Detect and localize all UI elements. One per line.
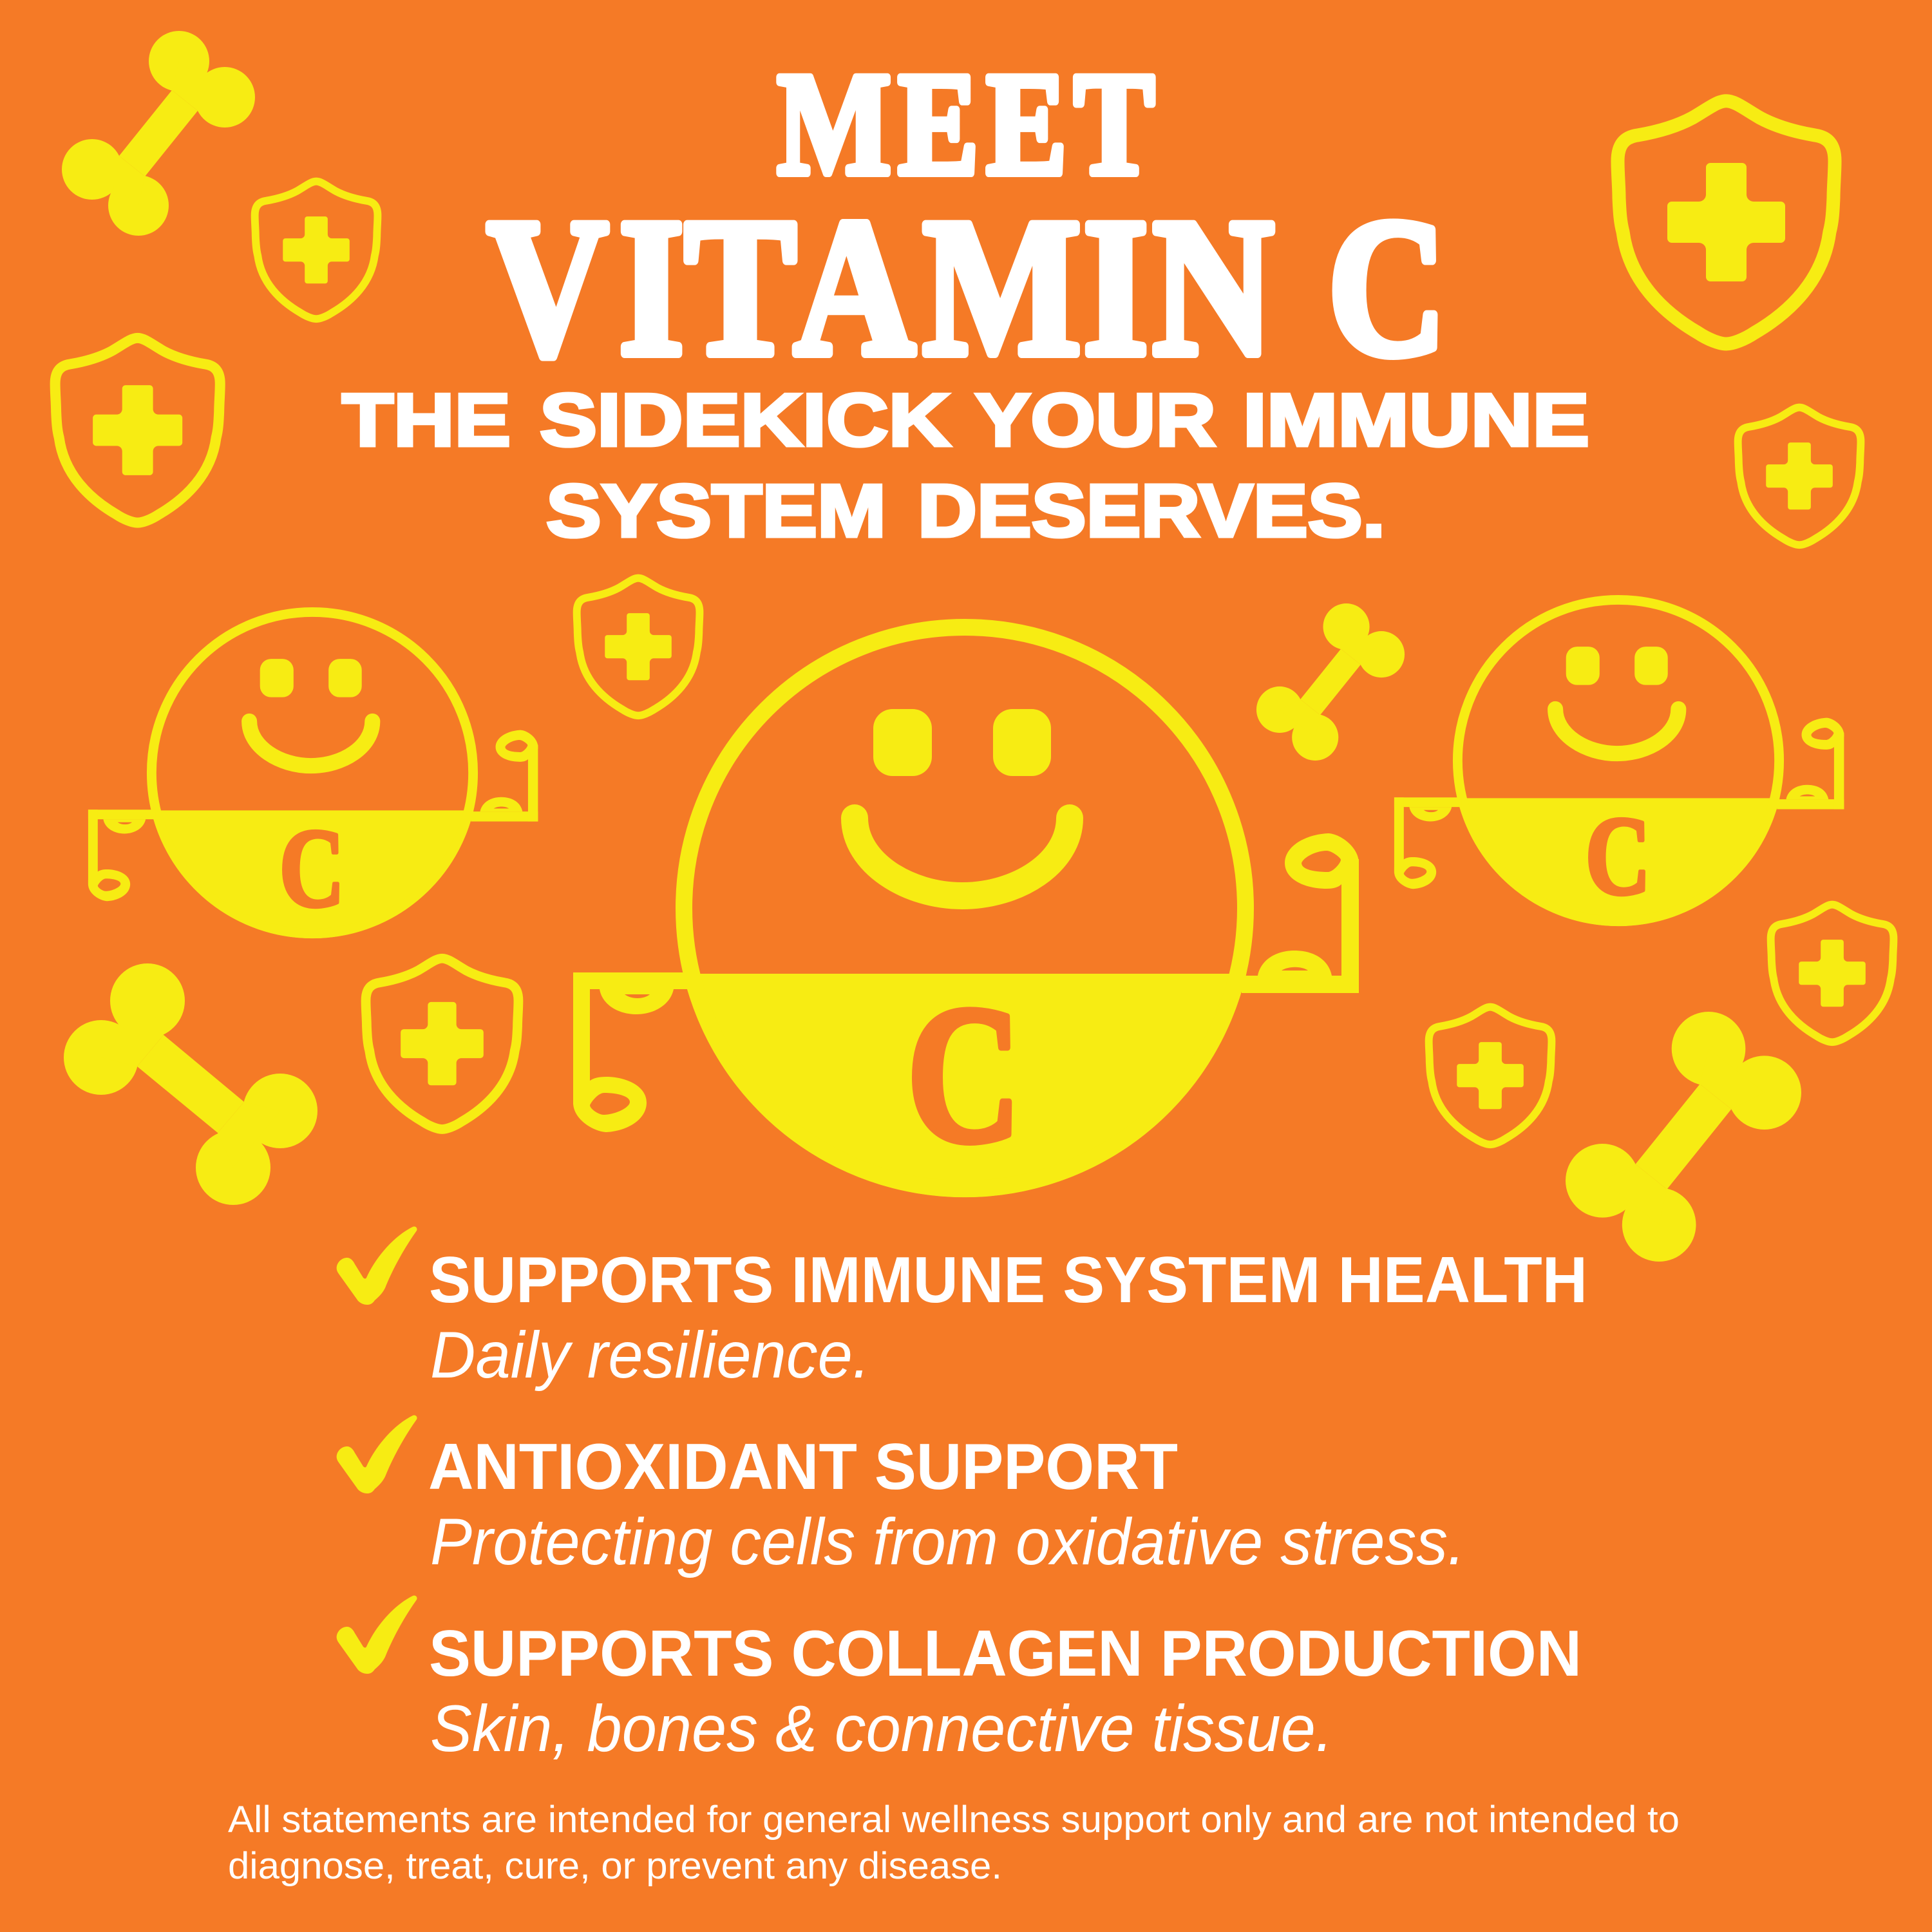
benefit detail: Skin, bones & connective tissue. [430, 1692, 1333, 1765]
icon: shield lower right [1771, 905, 1893, 1042]
disclaimer: diagnose, treat, cure, or prevent any disease. [228, 1845, 1002, 1887]
icon: bone top left [62, 31, 255, 236]
benefit detail: Protecting cells from oxidative stress. [430, 1505, 1465, 1578]
benefit heading: SUPPORTS COLLAGEN PRODUCTION [429, 1618, 1582, 1690]
icon: shield right [1738, 408, 1861, 545]
icon: check mark [337, 1595, 417, 1674]
subtitle: SYSTEM [546, 469, 886, 553]
subtitle: IMMUNE [1243, 378, 1589, 462]
character: centre vitamin c face: C [907, 965, 1021, 1184]
character: right vitamin c face: C [1585, 793, 1651, 918]
disclaimer [228, 1799, 1680, 1887]
subtitle: THE [342, 378, 511, 462]
subtitle: SIDEKICK [540, 378, 951, 462]
icon: shield lower middle right [1429, 1007, 1551, 1144]
title [487, 43, 1446, 397]
icon: shield left [55, 338, 220, 523]
benefit: collagen [337, 1595, 1582, 1765]
icon: bone lower left [64, 963, 317, 1205]
subtitle [342, 378, 1589, 553]
icon: shield lower left [366, 958, 518, 1129]
benefit detail: Daily resilience. [430, 1318, 870, 1392]
benefit heading: SUPPORTS IMMUNE SYSTEM HEALTH [429, 1244, 1587, 1316]
icon: shield top right large [1618, 101, 1835, 344]
benefit heading: ANTIOXIDANT SUPPORT [428, 1431, 1178, 1503]
icon: check mark [337, 1415, 417, 1493]
benefit: antioxidant [337, 1415, 1465, 1578]
icon: bone lower right [1566, 1012, 1801, 1262]
title line: meet: MEET [777, 43, 1155, 205]
character: right vitamin c face [1394, 600, 1844, 926]
benefit: immune support [337, 1226, 1587, 1392]
icon: shield centre [577, 578, 699, 715]
subtitle: DESERVES. [918, 469, 1385, 553]
title line: vitamin c: C [1328, 178, 1446, 397]
icon: bone centre right [1256, 603, 1405, 761]
character: centre vitamin c face [573, 627, 1359, 1197]
subtitle: YOUR [975, 378, 1216, 462]
character: left vitamin c face [88, 612, 538, 938]
disclaimer: All statements are intended for general wellness support only and are not intended to [228, 1799, 1680, 1841]
icon: check mark [337, 1226, 417, 1305]
title line: vitamin c: VITAMIN [488, 178, 1274, 397]
icon: shield top left small [255, 182, 377, 319]
character: left vitamin c face: C [279, 806, 345, 931]
